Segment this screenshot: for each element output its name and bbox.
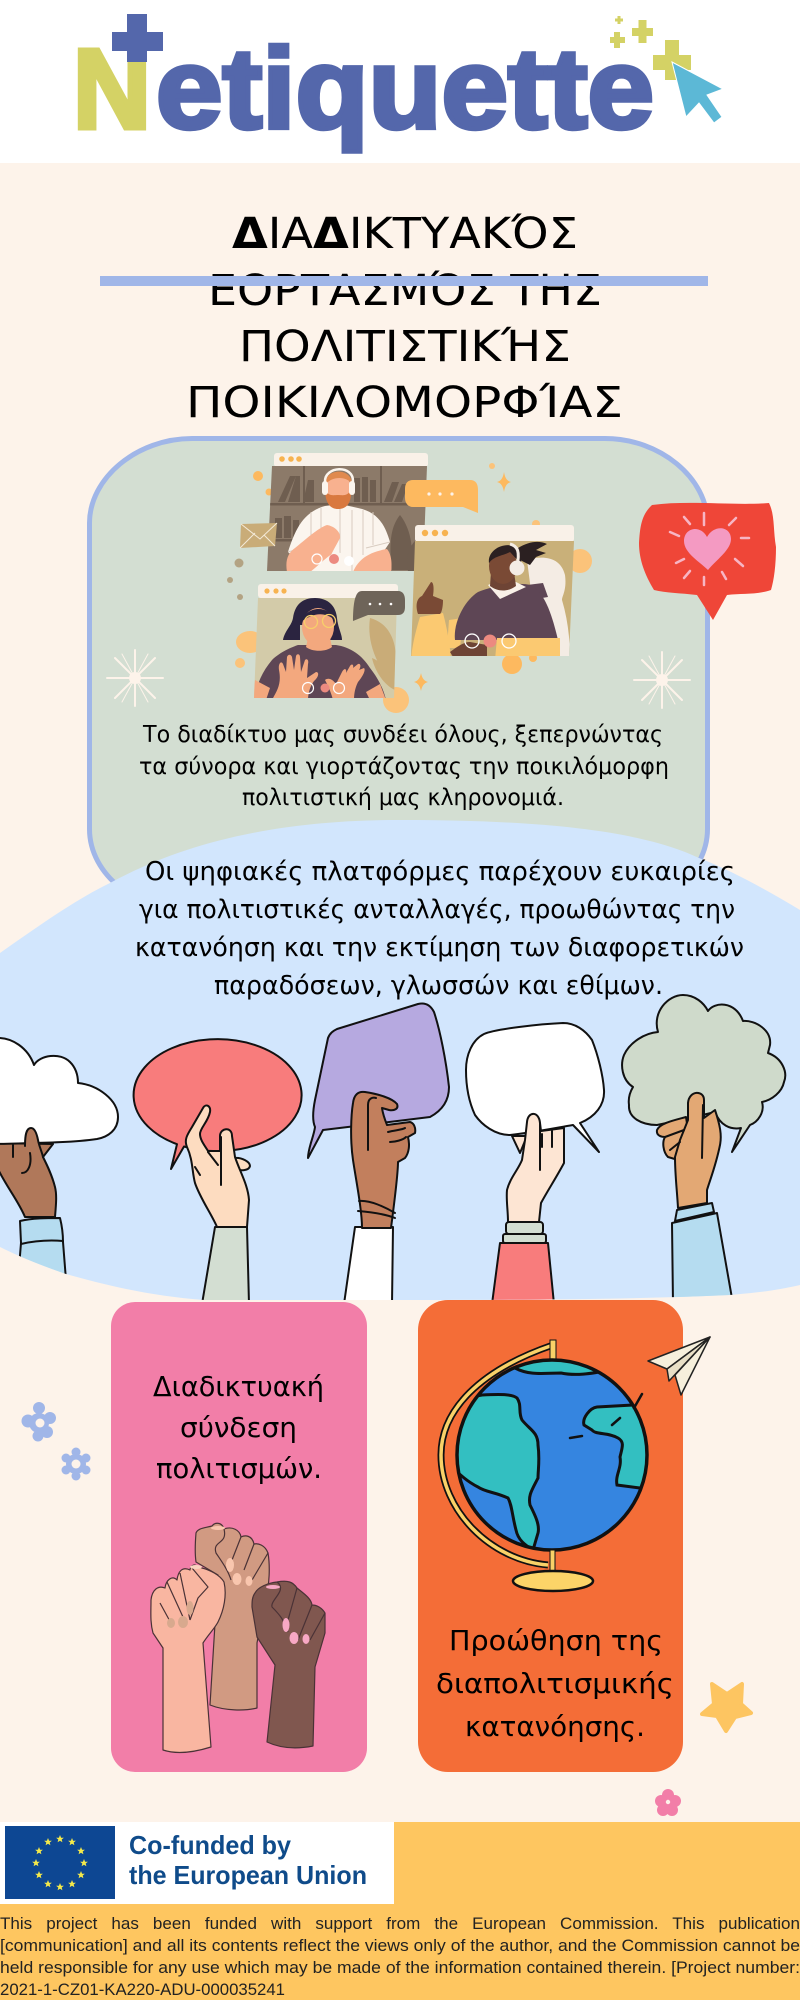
sparkle: left xyxy=(107,650,163,706)
hand with white cloud xyxy=(0,1038,118,1280)
text block: digital platforms xyxy=(135,857,744,1001)
icon: heart speech bubble xyxy=(639,503,776,620)
card: intercultural understanding xyxy=(418,1300,683,1772)
title: ΔΙΑΔΙΚΤΥΑΚΌΣ xyxy=(232,209,578,259)
icon: blue flower small xyxy=(62,1448,90,1480)
card text: πολιτισμών. xyxy=(156,1452,322,1485)
hand with green cloud xyxy=(622,995,785,1304)
text block: internet connects: τα σύνορα και γιορτάζοντας την ποικιλόμορφη xyxy=(139,752,669,780)
text block: digital platforms: παραδόσεων, γλωσσών και εθίμων. xyxy=(214,971,663,1001)
title: ΠΟΙΚΙΛΟΜΟΡΦΊΑΣ xyxy=(186,378,623,428)
illustration: globe xyxy=(441,1340,660,1591)
disclaimer text xyxy=(0,1915,800,1999)
icon: paper plane xyxy=(648,1337,710,1395)
text block: digital platforms: κατανόηση και την εκτίμηση των διαφορετικών xyxy=(135,933,744,963)
disclaimer text: 2021-1-CZ01-KA220-ADU-000035241 xyxy=(0,1981,285,1999)
video window: man xyxy=(265,453,430,572)
hand with purple bubble xyxy=(308,1003,449,1304)
text block: digital platforms: Οι ψηφιακές πλατφόρμες παρέχουν ευκαιρίες xyxy=(145,857,735,887)
title: ΠΟΛΙΤΙΣΤΙΚΉΣ xyxy=(239,322,571,372)
EU co-funding logo: the European Union xyxy=(129,1860,367,1890)
panel: blue blob background xyxy=(0,820,800,1300)
speech bubble: orange xyxy=(405,480,478,513)
illustration: video call xyxy=(227,453,592,713)
header logo: Netiquette: etiquette xyxy=(156,26,654,153)
illustration: raised fists xyxy=(151,1523,325,1753)
hand with red bubble xyxy=(134,1039,302,1304)
text block: internet connects: Το διαδίκτυο μας συνδέει όλους, ξεπερνώντας xyxy=(142,720,663,748)
video window: woman with glasses xyxy=(253,584,399,700)
icon: blue flower large xyxy=(22,1402,56,1442)
EU co-funding logo xyxy=(0,1822,394,1904)
header logo: Netiquette: N xyxy=(73,26,151,152)
text block: internet connects: πολιτιστική μας κληρονομιά. xyxy=(242,783,564,811)
title: ΕΟΡΤΑΣΜΌΣ ΤΗΣ xyxy=(208,266,602,316)
icon: envelope xyxy=(240,523,277,548)
title xyxy=(186,209,623,428)
hand with white bubble xyxy=(466,1023,604,1304)
card text: Διαδικτυακή xyxy=(153,1370,324,1403)
title accent bar xyxy=(100,276,708,286)
panel: internet connects us xyxy=(90,438,708,912)
EU co-funding logo: Co-funded by xyxy=(129,1830,292,1860)
disclaimer text: This project has been funded with support from the European Commission. This publication xyxy=(0,1915,800,1933)
card text: διαπολιτισμικής xyxy=(436,1667,674,1700)
card text: Προώθηση της xyxy=(449,1624,663,1657)
footer band xyxy=(0,1822,800,2000)
card text: κατανόησης. xyxy=(465,1710,645,1743)
card: connecting cultures xyxy=(111,1302,367,1772)
decorative dots xyxy=(227,463,592,713)
icon: pink flower xyxy=(655,1789,681,1816)
header logo: Netiquette xyxy=(0,0,800,163)
disclaimer text: [communication] and all its contents reflect the views only of the author, and the Commission cannot be xyxy=(0,1937,800,1955)
text block: digital platforms: για πολιτιστικές ανταλλαγές, προωθώντας την xyxy=(139,895,735,925)
sparkle: right xyxy=(634,652,690,708)
speech bubble: dark xyxy=(353,591,405,621)
card text xyxy=(436,1624,674,1743)
card text: σύνδεση xyxy=(180,1411,297,1444)
icon: EU flag xyxy=(5,1826,115,1899)
card text xyxy=(153,1370,324,1485)
icon: yellow star xyxy=(702,1684,751,1731)
disclaimer text: held responsible for any use which may be made of the information contained therein. [Project number: xyxy=(0,1959,800,1977)
video window: person with hoodie xyxy=(410,525,575,660)
illustration: raised hands with speech bubbles xyxy=(0,995,785,1304)
text block: internet connects xyxy=(139,720,669,811)
